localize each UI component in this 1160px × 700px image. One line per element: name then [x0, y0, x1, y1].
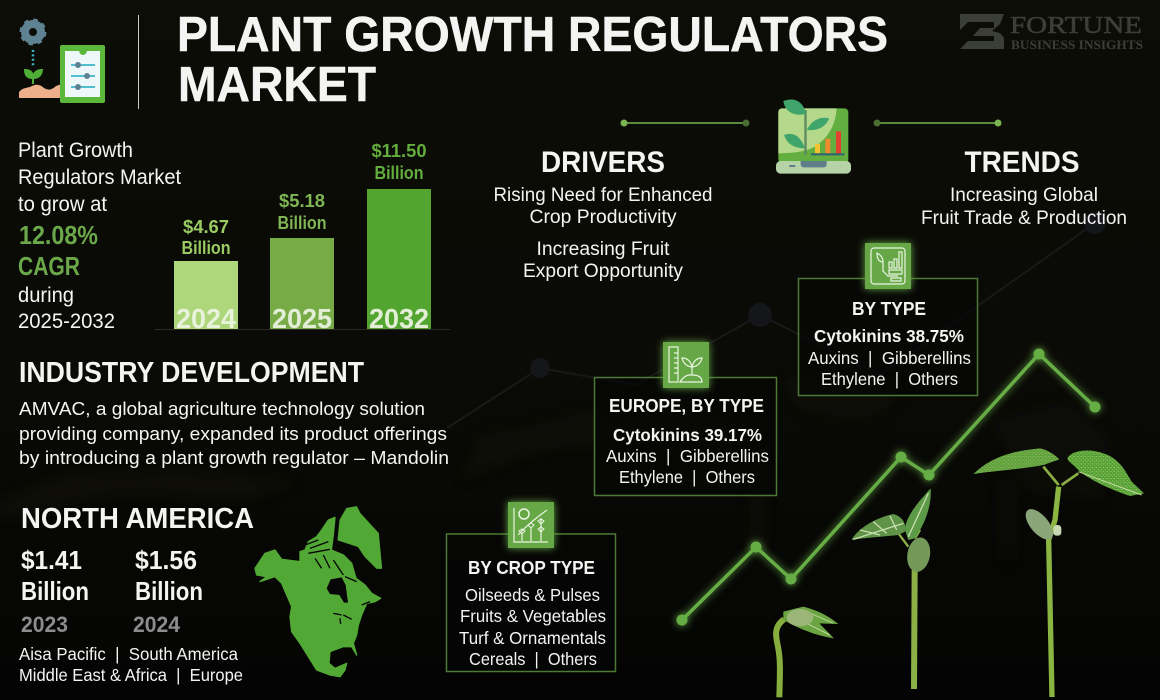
panel: industry development — [19, 357, 449, 468]
icon: plant chart — [865, 243, 911, 289]
panel: by type: BY TYPE — [852, 298, 926, 319]
line chart: growth trend — [676, 348, 1100, 626]
connector right — [874, 120, 1002, 126]
map: north america — [255, 507, 382, 677]
plant: seedling tall — [973, 448, 1144, 697]
logo: Fortune Business Insights: BUSINESS INSIGHTS — [1011, 38, 1143, 52]
panel: by type: Ethylene | Others — [821, 369, 958, 389]
panel: europe by type: Auxins | Gibberellins — [606, 446, 769, 466]
panel: by crop type: BY CROP TYPE — [468, 557, 595, 578]
panel: industry development: INDUSTRY DEVELOPMENT — [19, 357, 364, 389]
panel: by crop type: Turf & Ornamentals — [459, 628, 606, 648]
panel: by type: Cytokinins 38.75% — [814, 326, 964, 346]
panel: north america: NORTH AMERICA — [21, 503, 254, 535]
bar chart: market size — [155, 141, 450, 334]
text block: market CAGR: Regulators Market — [18, 166, 181, 189]
text block: market CAGR: 12.08% — [19, 220, 98, 250]
plant: seedling medium — [852, 488, 933, 689]
bar: 2032: Billion — [374, 163, 424, 183]
panel: europe by type: Ethylene | Others — [619, 467, 755, 487]
panel: by crop type: Cereals | Others — [469, 649, 597, 669]
panel: trends: Increasing Global — [950, 185, 1098, 206]
logo: Fortune Business Insights: FORTUNE — [1010, 13, 1142, 39]
title — [177, 8, 888, 112]
bar: 2024: 2024 — [176, 303, 236, 334]
panel: north america: Billion — [21, 576, 89, 606]
panel: europe by type — [594, 342, 776, 496]
panel: drivers: Export Opportunity — [523, 261, 683, 282]
divider — [138, 15, 140, 109]
panel: industry development: providing company, expanded its product offerings — [19, 423, 447, 444]
bar: 2032: 2032 — [369, 303, 429, 334]
panel: by type: Auxins | Gibberellins — [808, 348, 971, 368]
icon: crop growth chart — [508, 502, 554, 548]
panel: trends: Fruit Trade & Production — [921, 208, 1127, 229]
panel: by crop type: Oilseeds & Pulses — [465, 585, 600, 605]
icon: ruler and sprout — [663, 342, 709, 388]
panel: north america: $1.56 — [135, 545, 197, 575]
bar: 2025 — [270, 191, 334, 334]
panel: trends — [921, 146, 1127, 229]
plant: seedling small — [776, 607, 838, 697]
title: PLANT GROWTH REGULATORS — [177, 8, 888, 62]
panel: by crop type — [446, 502, 616, 672]
panel: europe by type: Cytokinins 39.17% — [613, 425, 762, 445]
text block: market CAGR — [18, 139, 181, 333]
icon: plant regulator clipboard — [19, 20, 105, 103]
panel: industry development: by introducing a plant growth regulator – Mandolin — [19, 447, 449, 468]
panel: north america: 2023 — [21, 612, 68, 637]
panel: north america: Billion — [135, 576, 203, 606]
panel: drivers: Rising Need for Enhanced — [494, 185, 712, 206]
bar: 2025: 2025 — [272, 303, 332, 334]
panel: north america: $1.41 — [21, 545, 82, 575]
panel: drivers: Increasing Fruit — [536, 239, 670, 260]
panel: by type — [798, 243, 978, 396]
panel: drivers — [494, 146, 712, 282]
bar: 2032: $11.50 — [372, 141, 426, 161]
panel: drivers: DRIVERS — [541, 146, 665, 179]
bar: 2024: Billion — [182, 238, 230, 258]
bar: 2024 — [174, 217, 238, 334]
logo: Fortune Business Insights — [960, 13, 1143, 52]
panel: industry development: AMVAC, a global agriculture technology solution — [19, 398, 425, 419]
panel: north america — [19, 503, 254, 685]
bar: 2024: $4.67 — [183, 217, 229, 237]
title: MARKET — [178, 58, 376, 112]
bar: 2025: $5.18 — [279, 191, 325, 211]
panel: trends: TRENDS — [964, 146, 1080, 179]
panel: north america: 2024 — [133, 612, 181, 637]
bar: 2032 — [367, 141, 431, 334]
text block: market CAGR: CAGR — [18, 251, 80, 281]
text block: market CAGR: 2025-2032 — [18, 310, 115, 333]
text block: market CAGR: during — [18, 284, 74, 307]
text block: market CAGR: Plant Growth — [18, 139, 133, 162]
panel: europe by type: EUROPE, BY TYPE — [609, 395, 764, 416]
panel: drivers: Crop Productivity — [530, 207, 677, 228]
icon: laptop with plant — [776, 99, 851, 174]
panel: north america: Middle East & Africa | Europe — [19, 665, 243, 685]
panel: north america: Aisa Pacific | South America — [19, 644, 238, 664]
text block: market CAGR: to grow at — [18, 193, 107, 216]
panel: by crop type: Fruits & Vegetables — [460, 606, 606, 626]
bar: 2025: Billion — [278, 213, 326, 233]
drivers-trends connector left — [620, 120, 750, 126]
